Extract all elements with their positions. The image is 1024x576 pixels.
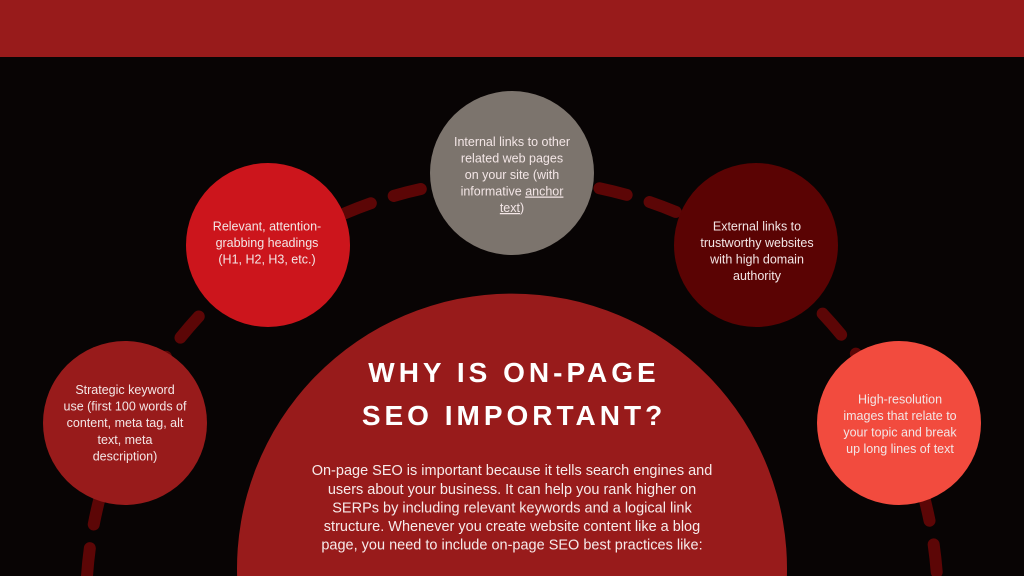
circle: internal links: related web pages <box>461 152 563 166</box>
circle: external links: authority <box>733 269 782 283</box>
body text: users about your business. It can help you rank higher on <box>328 482 696 498</box>
circle: strategic keyword use: text, meta <box>98 433 152 447</box>
circle: headings: grabbing headings <box>216 236 318 250</box>
body text: structure. Whenever you create website content like a blog <box>324 519 700 535</box>
title: SEO IMPORTANT? <box>362 400 666 431</box>
circle: external links: External links to <box>713 220 801 234</box>
body text: On-page SEO is important because it tells search engines and <box>312 463 712 479</box>
circle: strategic keyword use <box>43 341 207 505</box>
body text: page, you need to include on-page SEO best practices like: <box>321 538 703 554</box>
title <box>362 357 666 431</box>
dashed arc connector <box>87 179 937 576</box>
circle: strategic keyword use: Strategic keyword <box>75 383 175 397</box>
circle: external links <box>674 163 838 327</box>
circle: strategic keyword use: description) <box>93 450 157 464</box>
circle: high-resolution images: images that relate to <box>843 409 957 423</box>
title: WHY IS ON-PAGE <box>368 357 660 388</box>
circle: headings: (H1, H2, H3, etc.) <box>218 252 316 266</box>
body text <box>312 463 712 554</box>
circle: internal links: on your site (with <box>465 168 559 182</box>
circle: high-resolution images: up long lines of text <box>846 442 954 456</box>
circle: internal links <box>430 91 594 255</box>
circle: internal links: informative anchor <box>461 184 563 198</box>
circle: headings: Relevant, attention- <box>213 220 321 234</box>
circle: strategic keyword use: content, meta tag, alt <box>67 416 184 430</box>
circle: headings <box>186 163 350 327</box>
circle: high-resolution images <box>817 341 981 505</box>
body text: SERPs by including relevant keywords and a logical link <box>332 500 692 516</box>
circle: high-resolution images: High-resolution <box>858 392 942 406</box>
circle: high-resolution images: your topic and break <box>843 426 957 440</box>
circle: internal links: Internal links to other <box>454 135 570 149</box>
top bar <box>0 0 1024 57</box>
circle: external links: trustworthy websites <box>700 236 814 250</box>
circle: external links: with high domain <box>709 252 804 266</box>
circle: strategic keyword use: use (first 100 words of <box>64 400 187 414</box>
main semicircle panel <box>237 294 787 576</box>
circle: internal links: text) <box>500 201 524 215</box>
